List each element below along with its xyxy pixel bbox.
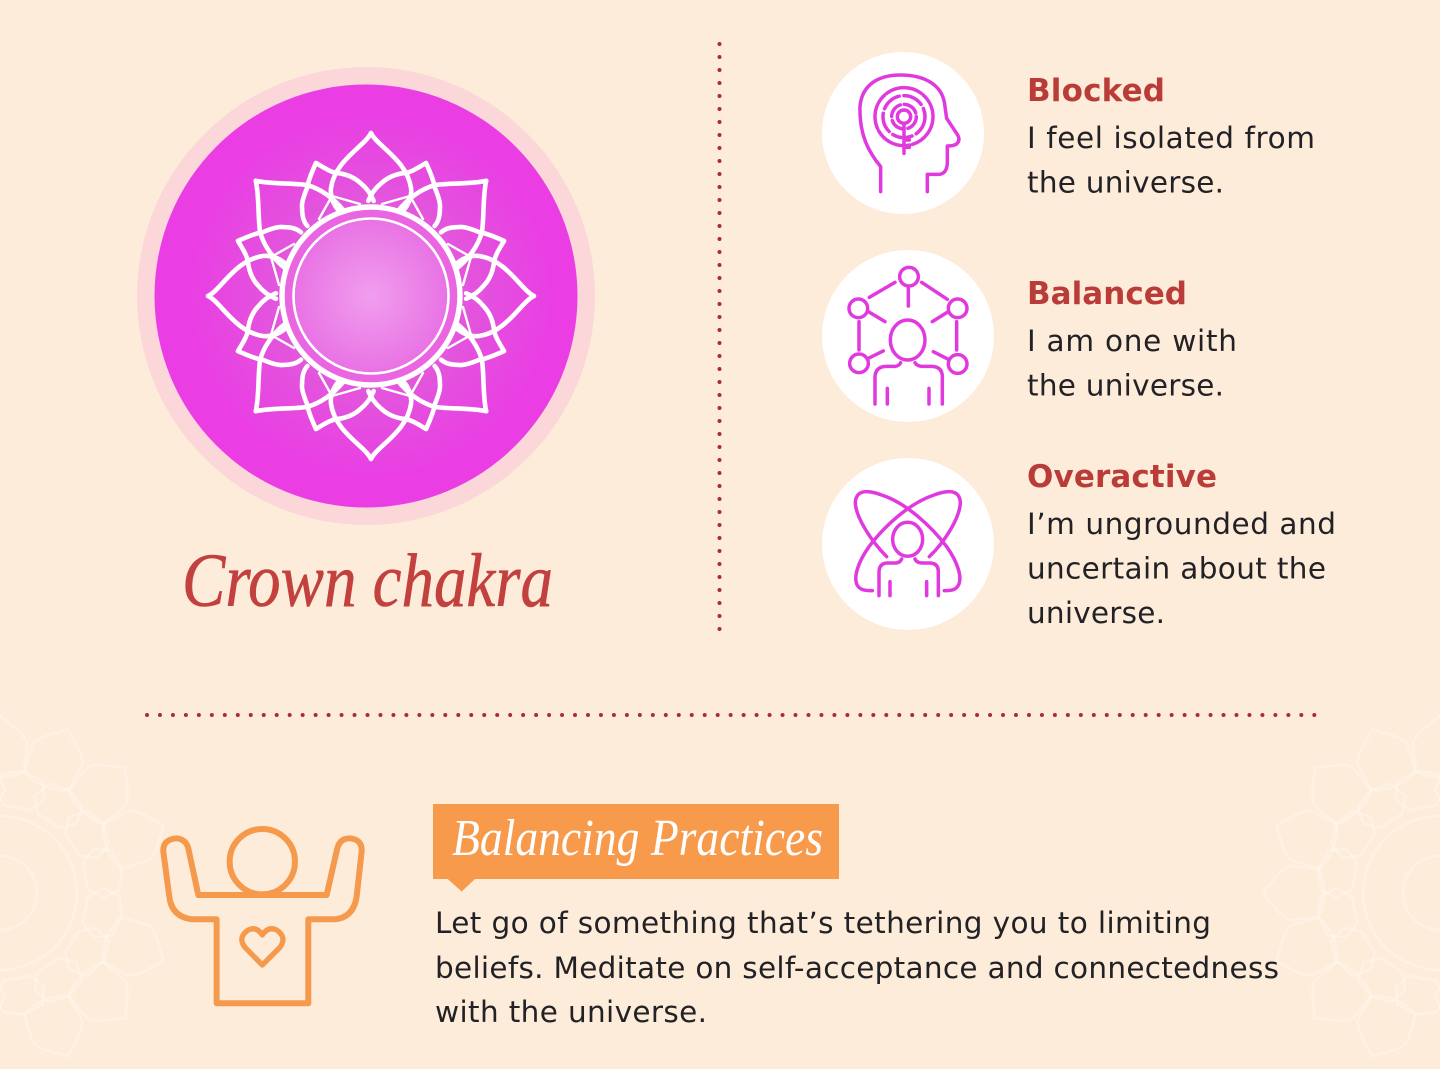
icon: person in network <box>822 250 994 422</box>
banner shape <box>433 804 839 892</box>
text block: Blocked <box>1027 73 1315 200</box>
text block: Blocked: I feel isolated from <box>1027 121 1315 155</box>
text block: practices: beliefs. Meditate on self-acceptance and connectedness <box>435 951 1279 985</box>
banner heading: Balancing Practices <box>452 810 823 867</box>
text block: Blocked: Blocked <box>1027 73 1165 109</box>
text block: Balanced: the universe. <box>1027 368 1224 402</box>
text block: Overactive: uncertain about the <box>1027 552 1326 586</box>
text block: practices <box>435 906 1279 1029</box>
lotus glow <box>186 111 556 481</box>
text block: Balanced: I am one with <box>1027 324 1237 358</box>
icon: person in orbits <box>822 458 994 630</box>
vertical dotted divider <box>718 44 722 630</box>
text block: Overactive: universe. <box>1027 596 1165 630</box>
decorative lotus left <box>0 716 174 1067</box>
horizontal dotted divider <box>147 713 1318 717</box>
emblem halo <box>137 67 595 525</box>
emblem disc <box>154 84 578 508</box>
text block: Blocked: the universe. <box>1027 166 1224 200</box>
text block: Balanced <box>1027 276 1237 402</box>
text block: practices: with the universe. <box>435 995 707 1029</box>
text block: practices: Let go of something that’s tethering you to limiting <box>435 906 1211 940</box>
text block: Balanced: Balanced <box>1027 276 1187 312</box>
text block: Overactive <box>1027 459 1336 630</box>
icon: head with maze <box>822 52 984 214</box>
icon: person with heart <box>163 829 362 1003</box>
text block: Overactive: Overactive <box>1027 459 1217 495</box>
title: Crown chakra: Crown chakra <box>182 539 553 623</box>
banner: Balancing Practices <box>433 804 839 892</box>
chakra emblem <box>137 67 595 525</box>
decorative lotus right <box>1263 716 1440 1067</box>
lotus symbol <box>208 133 534 459</box>
text block: Overactive: I’m ungrounded and <box>1027 507 1336 541</box>
